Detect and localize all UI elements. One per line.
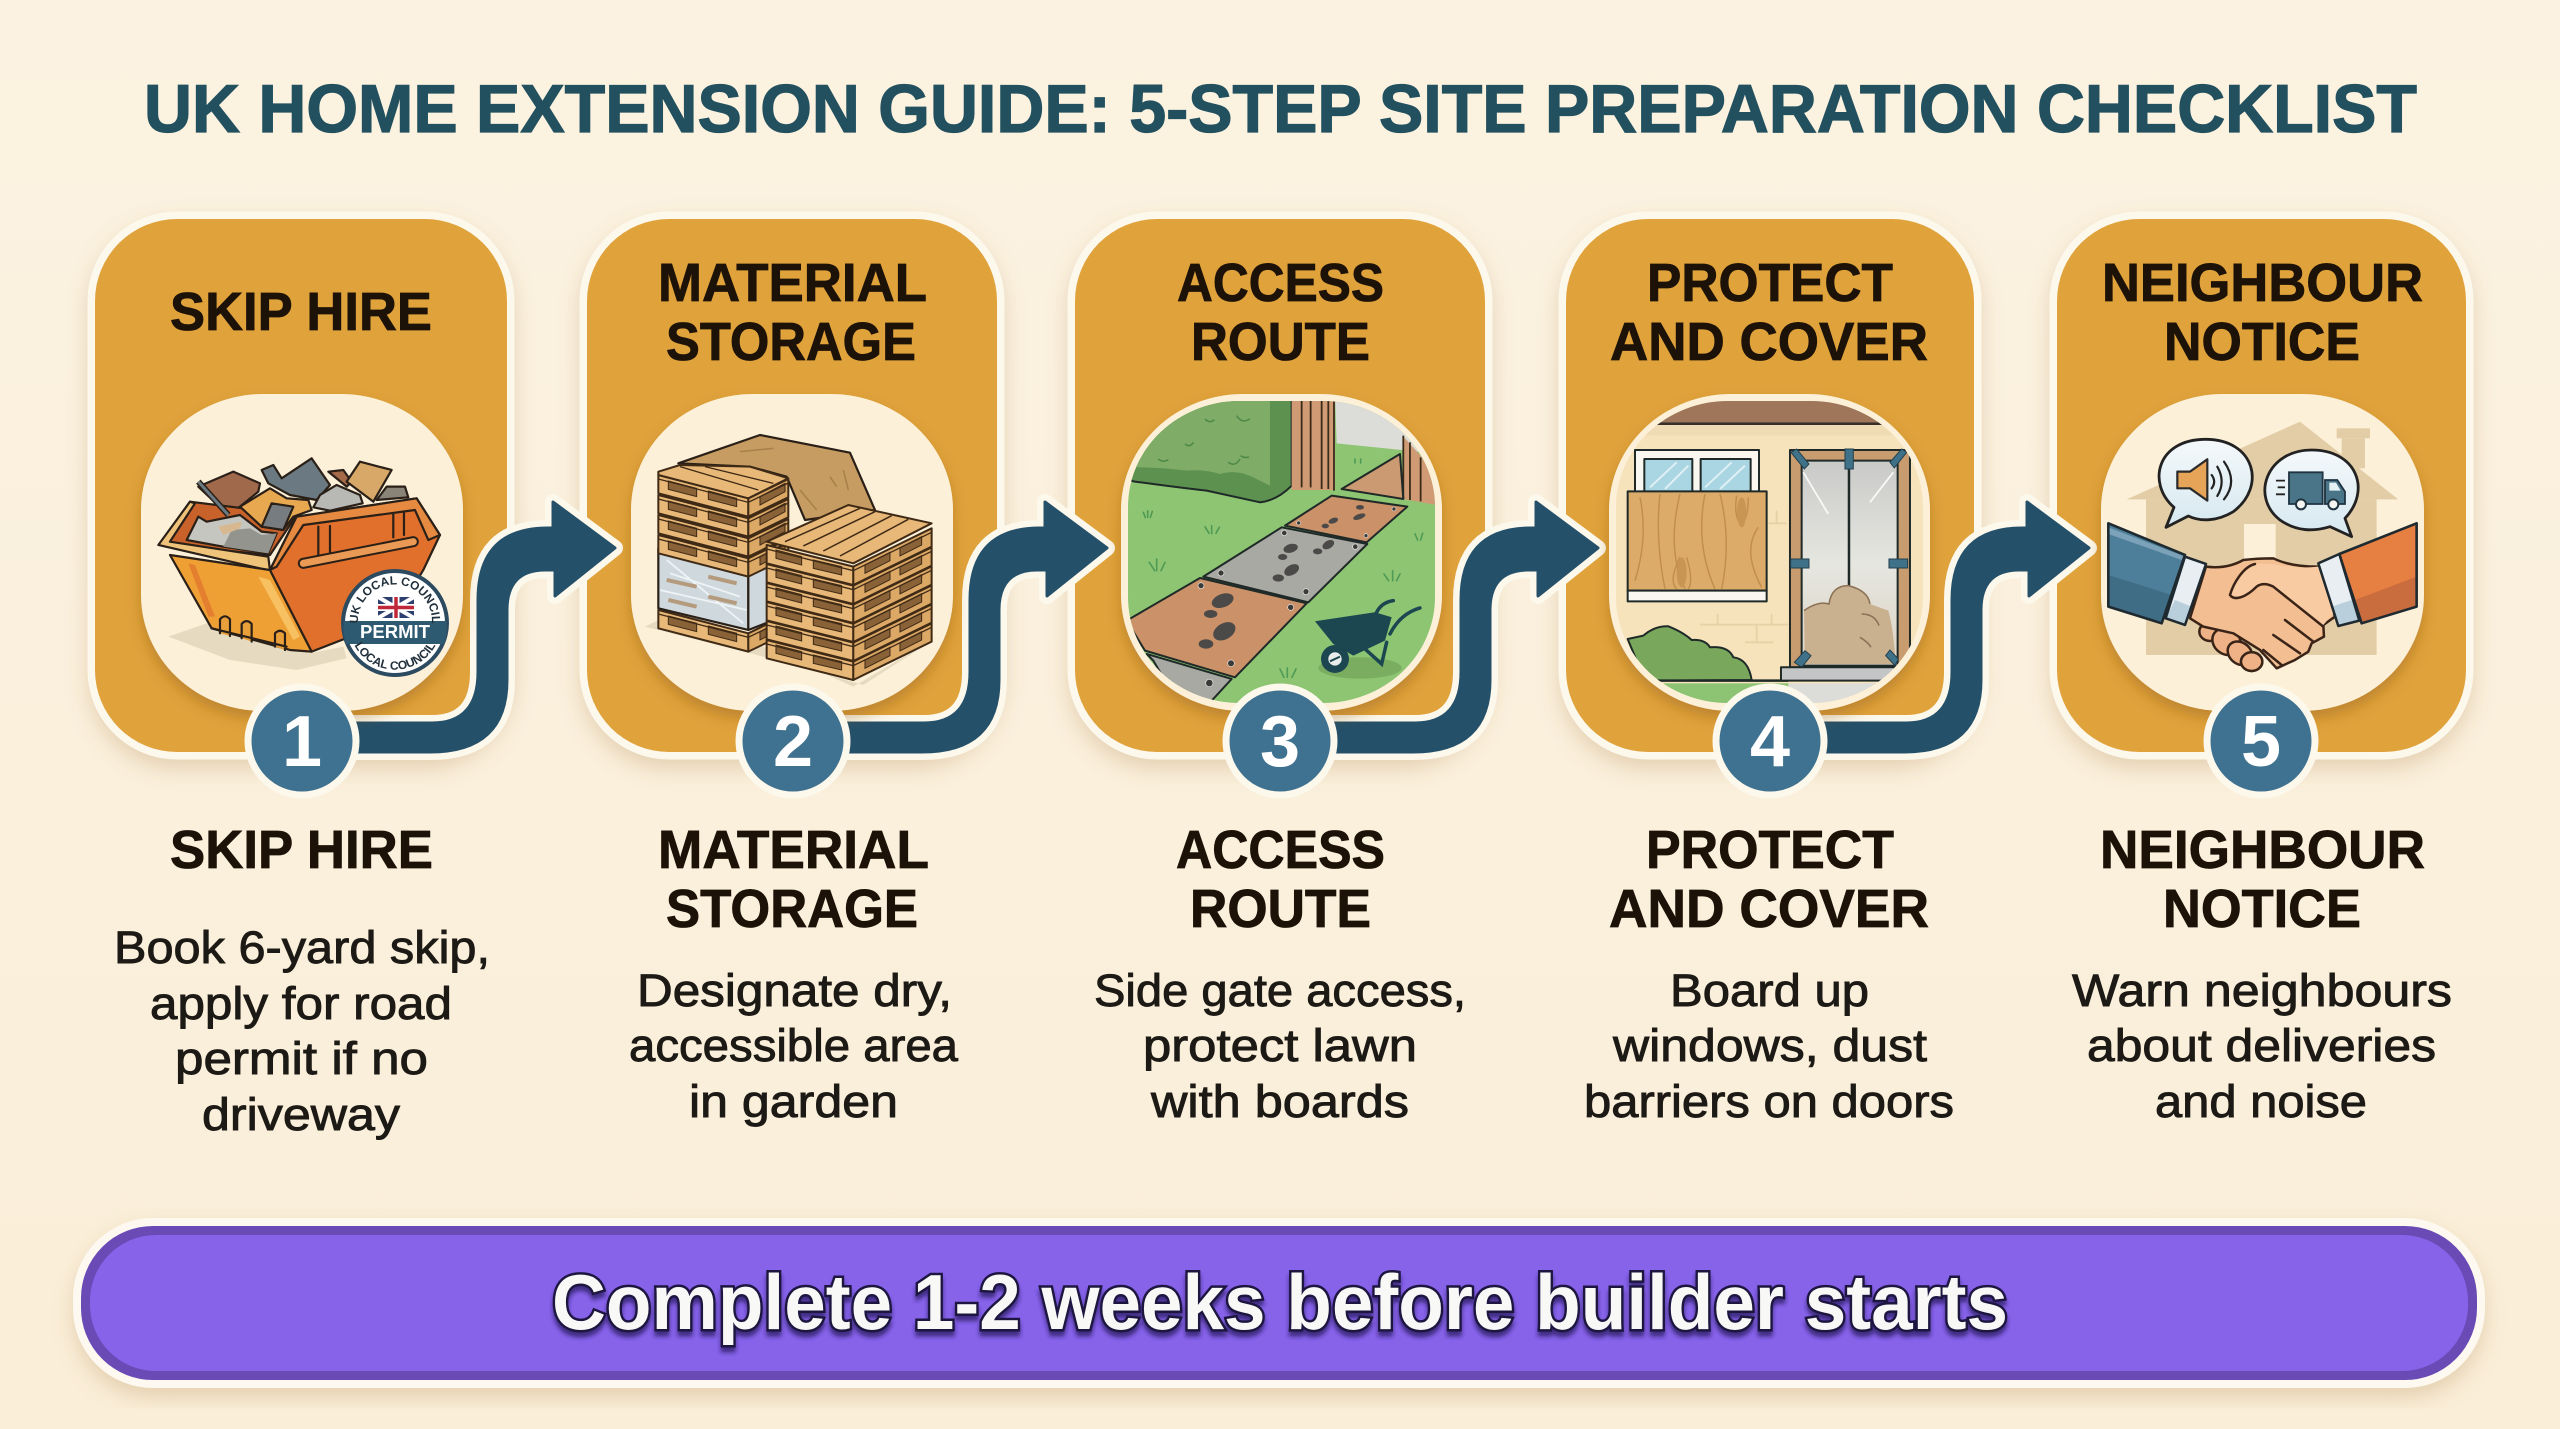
heading: card 1: SKIP HIRE [170, 282, 432, 342]
arrow: step 3 to 4 [1333, 502, 1598, 752]
step number 4 [1716, 687, 1824, 795]
icon: garden access route with boards [1120, 394, 1450, 717]
panel: step 3 card [1075, 219, 1485, 752]
icon: permit badge: LOCAL COUNCIL [354, 642, 436, 670]
panel: step 2 card [587, 219, 997, 752]
text block: step 5: NEIGHBOUR [2100, 820, 2425, 880]
text block: step 4: PROTECT [1646, 820, 1894, 880]
heading: card 5: NEIGHBOUR [2102, 253, 2423, 313]
text block: step 2: Designate dry, [637, 965, 952, 1016]
text block: step 5: NOTICE [2163, 879, 2361, 939]
heading: card 5: NOTICE [2164, 312, 2360, 372]
text block: step 2: in garden [689, 1076, 898, 1127]
text block: step 1: Book 6-yard skip, [114, 922, 490, 973]
heading: card 3: ACCESS [1177, 253, 1384, 313]
step number 5 [2207, 687, 2315, 795]
step number 5: 5 [2241, 702, 2281, 782]
text block: step 5: about deliveries [2087, 1020, 2436, 1071]
step number 1: 1 [282, 702, 322, 782]
step number 4: 4 [1750, 702, 1790, 782]
text block: step 3 [1094, 820, 1466, 1127]
heading: card 5 [2102, 253, 2423, 372]
step number 3: 3 [1260, 702, 1300, 782]
heading: card 2: MATERIAL [658, 253, 927, 313]
text block: step 5: Warn neighbours [2072, 965, 2452, 1016]
text block: step 4 [1584, 820, 1954, 1127]
text block: step 1: apply for road [150, 978, 452, 1029]
panel: step 1 card [95, 219, 507, 752]
heading: card 4: PROTECT [1647, 253, 1893, 313]
text block: step 1: SKIP HIRE [170, 820, 433, 880]
text block: step 2: STORAGE [666, 879, 918, 939]
arrow: step 4 to 5 [1824, 502, 2089, 752]
icon: skip with rubble and permit badge [136, 394, 472, 724]
callout banner: Complete 1-2 weeks before builder starts [552, 1258, 2008, 1346]
step number 3 [1226, 687, 1334, 795]
text block: step 2: accessible area [629, 1020, 959, 1071]
heading: card 2: STORAGE [666, 312, 916, 372]
text block: step 4: AND COVER [1609, 879, 1929, 939]
panel: step 5 card [2057, 219, 2466, 752]
arrow: step 1 to 2 [350, 502, 615, 752]
icon: permit badge [341, 569, 449, 677]
text block: step 5 [2072, 820, 2452, 1127]
text block: step 3: protect lawn [1143, 1020, 1417, 1071]
heading: card 2 [658, 253, 927, 372]
heading: card 3: ROUTE [1191, 312, 1370, 372]
icon: stacked pallets with tarp [631, 394, 953, 711]
icon: boarded window and dust barrier door [1605, 394, 1935, 714]
text block: step 4: barriers on doors [1584, 1076, 1954, 1127]
text block: step 5: and noise [2155, 1076, 2367, 1127]
panel: step 4 card [1566, 219, 1974, 752]
text block: step 2: MATERIAL [658, 820, 929, 880]
text block: step 1 [114, 820, 490, 1140]
text block: step 3: ROUTE [1190, 879, 1371, 939]
heading: card 4 [1610, 253, 1928, 372]
step number 2 [739, 687, 847, 795]
text block: step 1: permit if no [175, 1033, 428, 1084]
icon: permit badge: UK LOCAL COUNCIL [350, 576, 440, 624]
step number 1 [248, 687, 356, 795]
heading: card 3 [1177, 253, 1384, 372]
title: UK HOME EXTENSION GUIDE: 5-STEP SITE PREPARATION CHECKLIST [144, 71, 2417, 147]
text block: step 3: with boards [1150, 1076, 1409, 1127]
icon: neighbour handshake with speech bubbles [2101, 394, 2424, 711]
text block: step 3: Side gate access, [1094, 965, 1466, 1016]
icon: permit badge: PERMIT [360, 622, 430, 642]
heading: card 4: AND COVER [1610, 312, 1928, 372]
text block: step 2 [629, 820, 959, 1127]
text block: step 4: Board up [1670, 965, 1869, 1016]
text block: step 4: windows, dust [1612, 1020, 1928, 1071]
text block: step 3: ACCESS [1176, 820, 1385, 880]
step number 2: 2 [773, 702, 813, 782]
callout banner [77, 1222, 2481, 1384]
arrow: step 2 to 3 [842, 502, 1107, 752]
text block: step 1: driveway [202, 1089, 401, 1140]
